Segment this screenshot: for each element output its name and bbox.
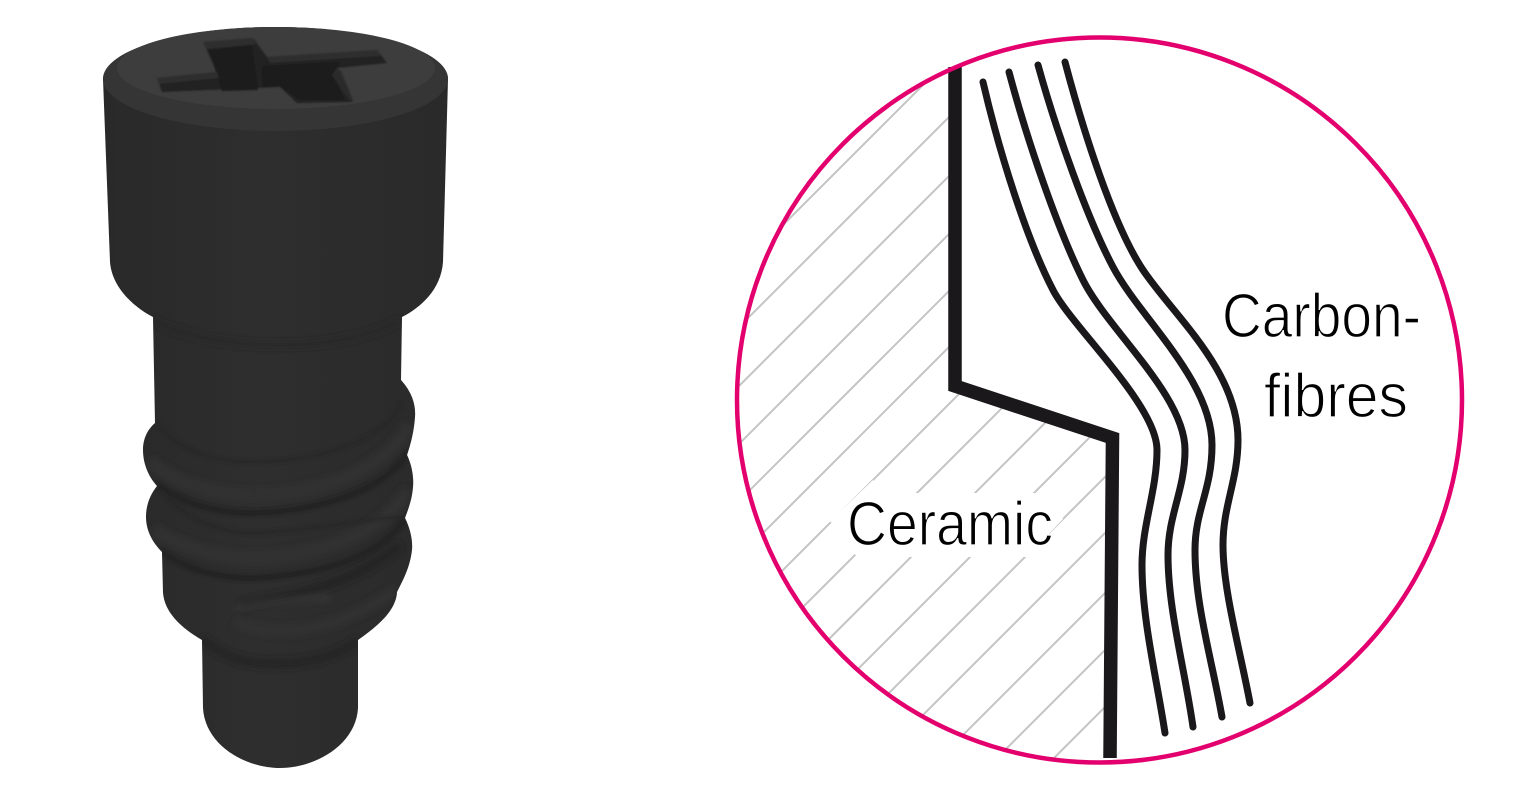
label backing for Ceramic — [830, 480, 1063, 557]
ring shading — [150, 320, 410, 664]
label: Carbon-fibres: fibres — [1264, 362, 1408, 431]
ceramic hatching — [740, 85, 1106, 758]
label: Ceramic: Ceramic — [847, 490, 1053, 559]
detail: cross-section in circle — [730, 10, 1462, 790]
cross slot recess — [157, 38, 387, 103]
screw head bevel — [103, 27, 448, 131]
label: Carbon-fibres — [1222, 282, 1421, 431]
magnifier circle — [737, 38, 1462, 762]
carbon fibres — [983, 62, 1250, 733]
screw body — [103, 27, 448, 768]
label: Carbon-fibres: Carbon- — [1222, 282, 1421, 351]
illustration: black screw — [103, 27, 448, 768]
screw head top face — [117, 27, 435, 109]
ceramic contour — [955, 67, 1112, 758]
